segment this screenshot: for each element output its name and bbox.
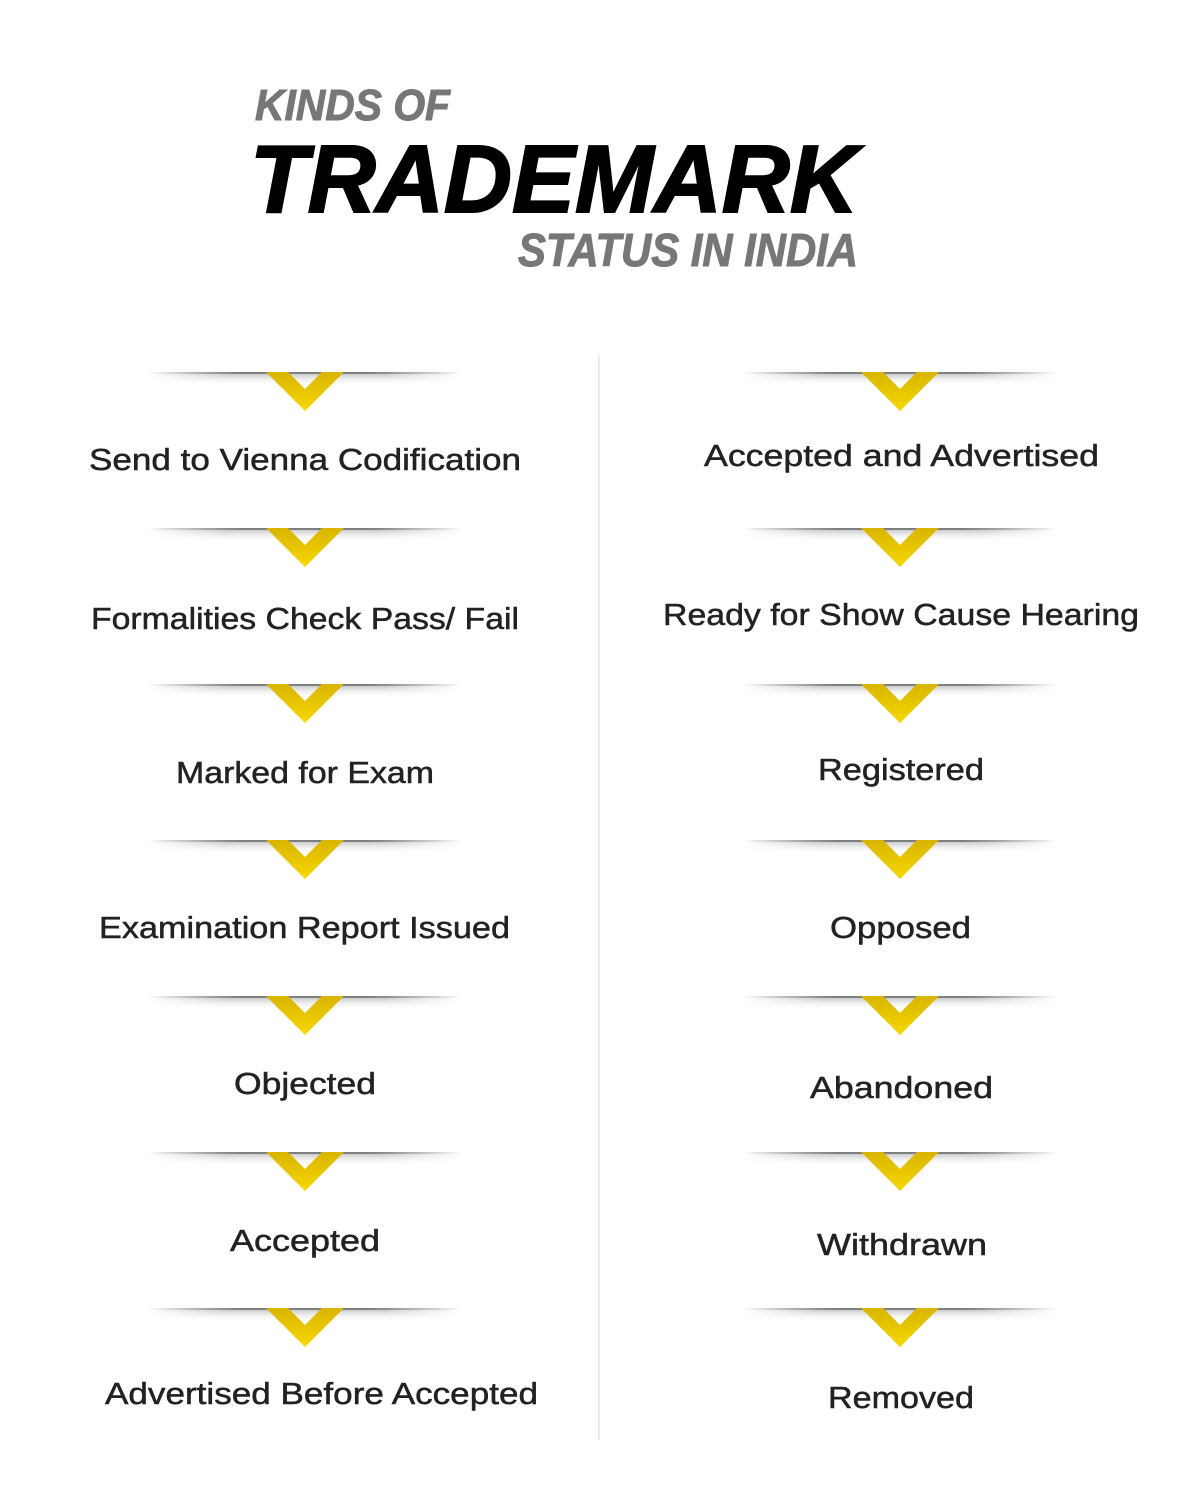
label: Marked for Exam [176,755,434,790]
chevron [148,996,462,1035]
label: Examination Report Issued [99,910,510,945]
label: Formalities Check Pass/ Fail [91,601,519,636]
label: Abandoned [810,1070,993,1105]
chevron [148,1308,462,1347]
chevron [148,528,462,567]
label: Opposed [830,910,971,945]
chevron [148,840,462,879]
divider [598,355,600,1440]
label: Registered [818,752,984,787]
label: Removed [828,1380,974,1415]
label: Accepted and Advertised [704,438,1099,473]
label: Send to Vienna Codification [89,442,521,477]
title line: status in india: STATUS IN INDIA [518,224,858,276]
chevron [743,372,1057,411]
chevron [743,840,1057,879]
chevron [148,684,462,723]
chevron [743,1152,1057,1191]
chevron [743,1308,1057,1347]
chevron [148,1152,462,1191]
label: Advertised Before Accepted [105,1376,538,1411]
panel: left column [89,372,538,1411]
label: Accepted [230,1223,380,1258]
chevron [148,372,462,411]
label: Ready for Show Cause Hearing [663,597,1139,632]
chevron [743,996,1057,1035]
chevron [743,528,1057,567]
title line: trademark: TRADEMARK [250,126,865,233]
panel: right column [663,372,1139,1415]
title [250,81,865,276]
label: Objected [234,1066,376,1101]
label: Withdrawn [817,1227,987,1262]
title line: kinds of: KINDS OF [255,81,451,130]
chevron [743,684,1057,723]
